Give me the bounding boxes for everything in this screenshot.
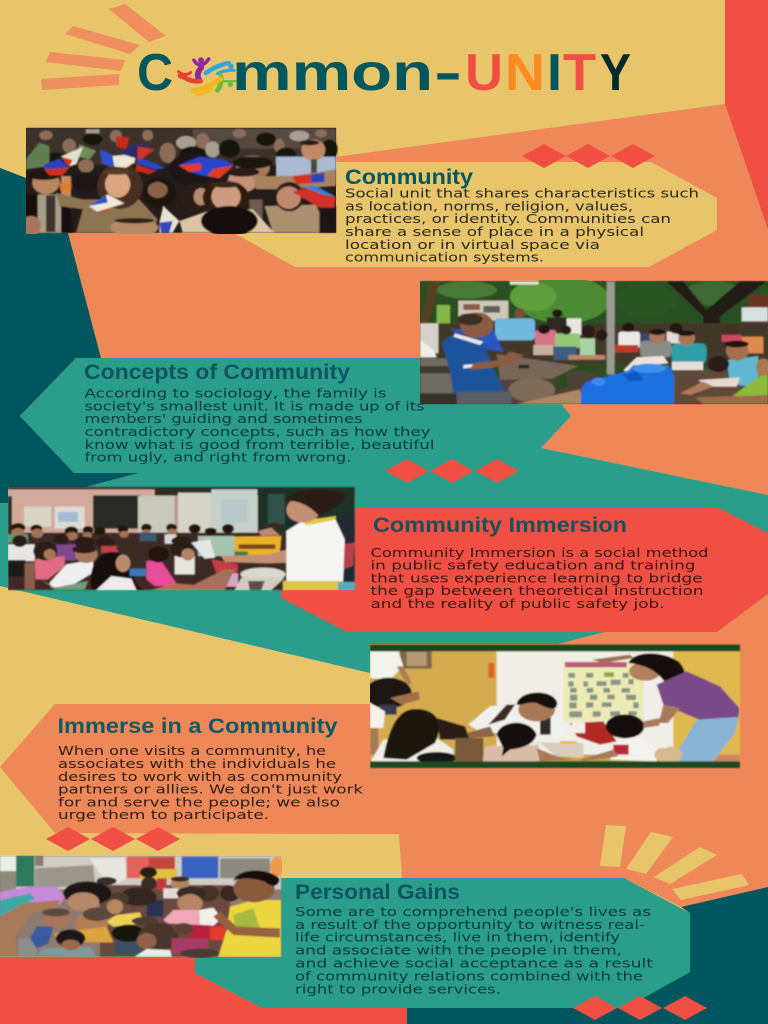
woman right <box>673 370 768 404</box>
title: U <box>465 44 503 102</box>
standing boy <box>199 908 222 926</box>
text block: Personal Gains: right to provide services. <box>295 981 501 996</box>
center woman <box>56 193 158 233</box>
kids <box>372 738 453 761</box>
text block: Community Immersion: Community Immersion is a social method <box>370 545 708 560</box>
photo: crowd waving Philippine flags <box>26 127 338 234</box>
panel: Personal Gains <box>195 878 690 1008</box>
background: orange band <box>68 104 768 495</box>
title: N <box>505 44 545 102</box>
heading: Community Immersion: Community Immersion <box>373 514 627 537</box>
icon: orange sun rays top-left <box>41 4 166 90</box>
title: C <box>137 44 173 102</box>
background: red top-right corner <box>725 0 768 230</box>
text block: Community: location or in virtual space via <box>345 237 600 252</box>
icon: community logo of people in a ring <box>177 57 236 96</box>
heading: Concepts of Community: Concepts of Community <box>84 361 350 384</box>
text block: Immerse in a Community <box>58 743 364 822</box>
text block: Personal Gains <box>295 904 653 996</box>
long-hair girl <box>91 552 145 590</box>
water container <box>581 365 674 404</box>
background: red bottom-left shape <box>0 957 407 1024</box>
title: I <box>547 44 562 102</box>
text block: Immerse in a Community: for and serve the people; we also <box>58 794 340 809</box>
panel: community text background <box>234 162 717 267</box>
text block: Immerse in a Community: partners or allies. We don't just work <box>58 782 364 797</box>
text block: Concepts of Community: According to sociology, the family is <box>84 386 386 401</box>
icon: community diamonds <box>522 144 655 168</box>
text block: Immerse in a Community: urge them to participate. <box>58 807 269 822</box>
text block: Community: communication systems. <box>345 250 544 265</box>
panel: Community Immersion <box>281 507 768 632</box>
text block: Community: Social unit that shares characteristics such <box>345 186 699 200</box>
text block: Concepts of Community: from ugly, and right from wrong. <box>84 450 352 465</box>
text block: Community Immersion: and the reality of public safety job. <box>370 596 664 611</box>
text block: Immerse in a Community: When one visits a community, he <box>58 743 326 758</box>
text block: Personal Gains: life circumstances, live in them, identify <box>295 930 621 945</box>
mid row <box>71 172 101 192</box>
big right man <box>276 157 336 177</box>
text block: Concepts of Community <box>84 386 434 465</box>
icon: concepts diamonds <box>385 459 519 483</box>
table and man <box>497 354 578 380</box>
right beige jackets <box>253 169 336 189</box>
text block: Immerse in a Community: desires to work with as community <box>58 769 343 784</box>
text block: Personal Gains: a result of the opportunity to witness real- <box>295 917 645 932</box>
text block: Community: share a sense of place in a physical <box>345 224 644 239</box>
heading: Immerse in a Community: Immerse in a Community <box>58 715 338 738</box>
text block: Personal Gains: of community relations combined with the <box>295 968 643 983</box>
photo: speaker with seated community under trees <box>420 280 768 405</box>
text block: Concepts of Community: contradictory concepts, such as how they <box>84 424 431 439</box>
photo: children around an alphabet chart <box>370 644 741 769</box>
left figures <box>370 651 403 680</box>
mid rows <box>8 544 35 561</box>
title: Y <box>600 44 631 102</box>
text block: Community Immersion: that uses experience learning to bridge <box>370 570 703 585</box>
text block: Community <box>345 186 699 265</box>
text block: Immerse in a Community: associates with the individuals he <box>58 756 336 771</box>
icon: immerse diamonds <box>46 827 180 851</box>
text block: Community: as location, norms, religion, values, <box>345 198 633 213</box>
photo: teacher reading to seated children <box>8 486 356 591</box>
text block: Community Immersion <box>370 545 708 611</box>
title: T <box>563 44 596 102</box>
back row people <box>495 318 535 340</box>
text block: Concepts of Community: members' guiding and sometimes <box>84 411 362 426</box>
text block: Concepts of Community: society's smallest unit. It is made up of its <box>84 398 424 413</box>
back heads <box>11 523 234 536</box>
teacher <box>592 655 633 663</box>
pink girl <box>146 561 178 586</box>
background: dark teal left shape <box>0 168 139 503</box>
center right woman <box>179 209 274 233</box>
background: green teal middle shape <box>0 358 768 673</box>
book <box>198 536 235 556</box>
center student <box>468 705 569 738</box>
title: mmon <box>232 44 433 102</box>
heading: Personal Gains: Personal Gains <box>295 881 460 904</box>
text block: Community Immersion: in public safety education and training <box>370 558 696 573</box>
photo: volunteer with children writing <box>0 855 282 958</box>
teacher <box>221 549 288 563</box>
text block: Personal Gains: Some are to comprehend people's lives as <box>295 904 651 919</box>
title <box>137 44 631 102</box>
seated child center <box>490 741 583 758</box>
white shirt girl <box>50 560 93 588</box>
red child <box>570 721 617 745</box>
stool <box>240 568 286 581</box>
title: - <box>434 44 462 102</box>
front kids <box>43 908 70 928</box>
background: dark teal bottom-right shape <box>407 887 768 1024</box>
background: lower orange shape <box>0 590 768 907</box>
heading: Community: Community <box>345 166 473 189</box>
text block: Community Immersion: the gap between theoretical instruction <box>370 583 704 598</box>
text block: Community: practices, or identity. Communities can <box>345 211 671 226</box>
raised arm <box>61 176 71 199</box>
text block: Concepts of Community: know what is good from terrible, beautiful <box>84 437 434 452</box>
flags <box>44 159 69 175</box>
text block: Personal Gains: and associate with the people in them, <box>295 943 622 958</box>
icon: personal gains diamonds <box>573 996 707 1020</box>
text block: Personal Gains: and achieve social acceptance as a result <box>295 955 653 970</box>
volunteer <box>0 887 65 917</box>
icon: yellow sun rays bottom-right <box>600 825 749 900</box>
left man <box>26 194 73 233</box>
panel: Concepts of Community <box>84 361 434 465</box>
girl pink left <box>35 556 65 579</box>
panel: Immerse in a Community <box>58 715 364 822</box>
